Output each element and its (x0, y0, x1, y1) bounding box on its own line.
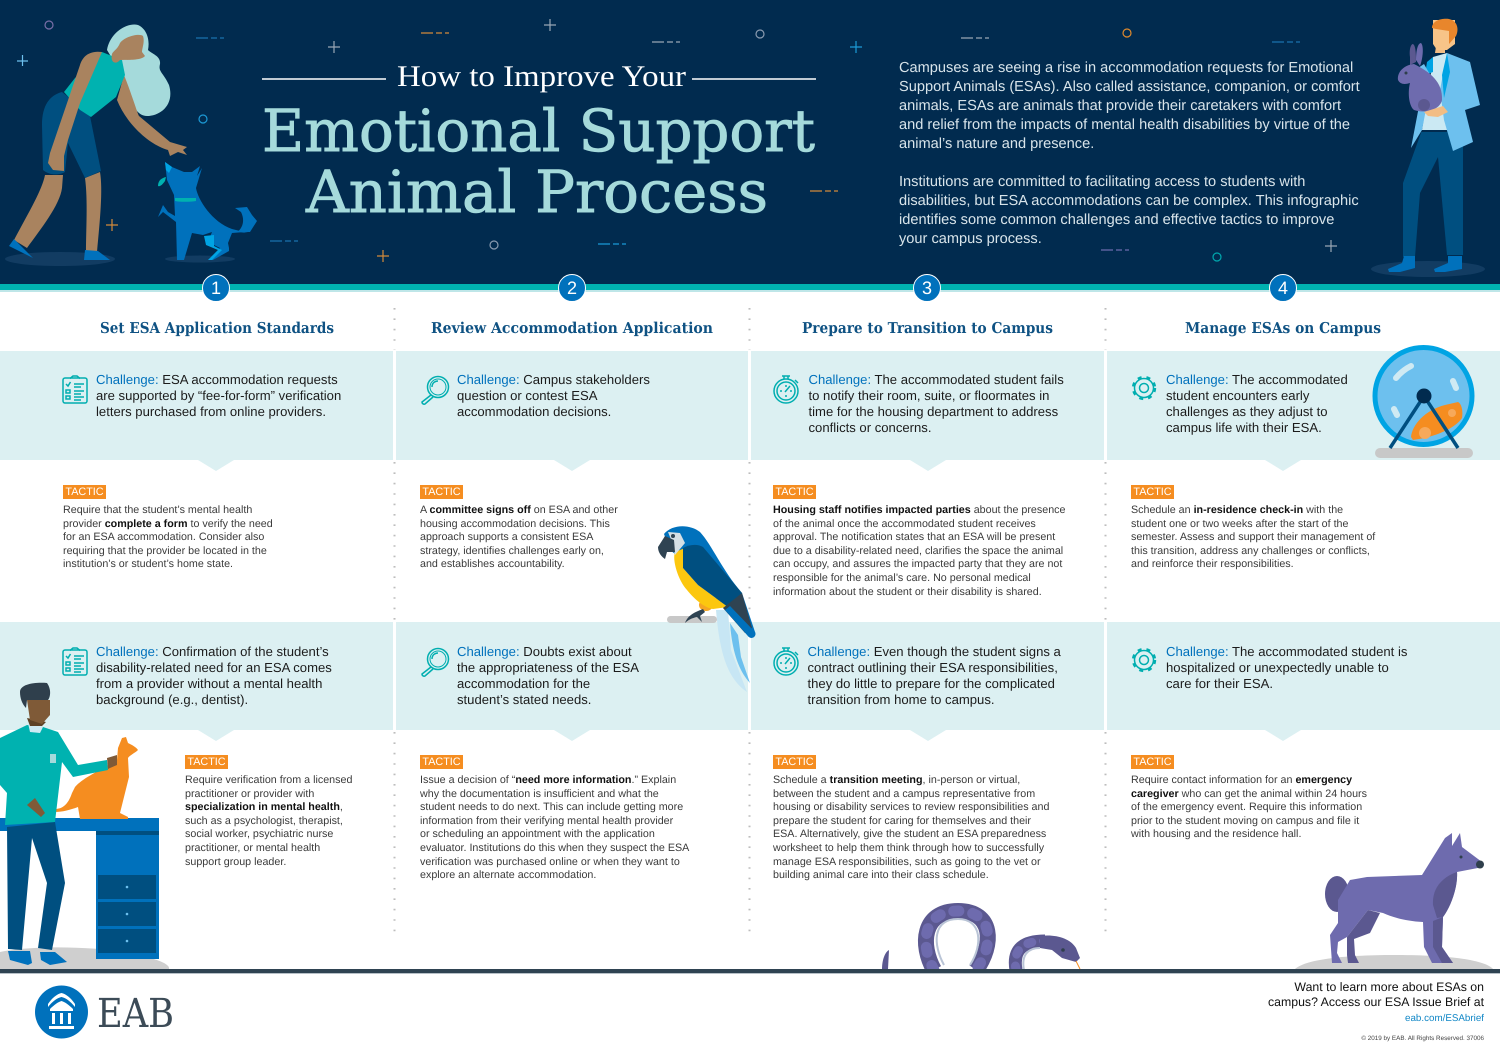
tactic text 3B: prepare the student for caring for themselves and their (773, 815, 1031, 827)
panel: challenge 4A (1107, 351, 1500, 460)
tactic text 1A: Require that the student’s mental health (63, 504, 252, 516)
tactic text 3A: of the animal once the accommodated student receives (773, 518, 1036, 530)
tactic text 3B: ESA. Alternatively, give the student an ESA preparedness (773, 828, 1046, 840)
tactic text 4A: student one or two weeks after the start of the (1131, 518, 1348, 530)
tactic text 2A: strategy, identifies challenges early on, (420, 545, 604, 557)
notch (198, 460, 234, 471)
tactic text 1B: practitioner, or mental health (185, 842, 320, 854)
tactic text 3A: can occupy, and assures the impacted party that they are not (773, 558, 1062, 570)
tactic text 2B: or scheduling an appointment with the application (420, 828, 655, 840)
teal band (0, 284, 1500, 292)
title: Animal Process (305, 158, 768, 226)
tactic text 1A: institution’s or student’s home state. (63, 558, 233, 570)
icon: stopwatch (773, 375, 799, 404)
challenge text 2A: Challenge: Campus stakeholders (457, 372, 650, 387)
tactic text 4A: Schedule an in-residence check-in with the (1131, 504, 1343, 516)
icon: stopwatch (773, 647, 799, 676)
panel: challenge 2B (396, 622, 748, 730)
step number 4 (1269, 274, 1297, 302)
notch (554, 730, 590, 741)
challenge text 4A: Challenge: The accommodated (1166, 372, 1348, 387)
challenge text 1B: background (e.g., dentist). (96, 692, 248, 707)
tactic text 4A (1131, 504, 1376, 570)
column headings: Manage ESAs on Campus (1185, 319, 1381, 337)
challenge text 1A (96, 372, 341, 419)
tactic label 1A: TACTIC (65, 486, 104, 498)
tactic text 3B: housing or disability services to review responsibilities and (773, 801, 1049, 813)
tactic text 2B: evaluator. Institutions do this when they suspect the ESA (420, 842, 689, 854)
step number 3: 3 (922, 278, 932, 298)
challenge text 4A: campus life with their ESA. (1166, 420, 1322, 435)
intro paragraph (899, 60, 1360, 246)
tactic label 4B: TACTIC (1133, 756, 1172, 768)
footer call to action: Want to learn more about ESAs on (1294, 980, 1484, 994)
challenge text 3A: to notify their room, suite, or floormates in (808, 388, 1049, 403)
icon: magnifier (421, 376, 450, 405)
panel: challenge 4B (1107, 622, 1500, 730)
header background (0, 0, 1500, 284)
challenge text 4B: Challenge: The accommodated student is (1166, 644, 1407, 659)
challenge text 2B: the appropriateness of the ESA (457, 660, 639, 675)
tactic text 2A: and establishes accountability. (420, 558, 565, 570)
step number 1 (202, 274, 230, 302)
tactic text 1A (63, 504, 273, 570)
logo: EAB (35, 986, 174, 1038)
challenge text 3A (808, 372, 1064, 435)
tactic text 1A: for an ESA accommodation. Consider also (63, 531, 264, 543)
tactic text 3A: responsible for the animal’s care. No personal medical (773, 572, 1031, 584)
challenge text 2A: accommodation decisions. (457, 404, 611, 419)
tactic text 3B: Schedule a transition meeting, in-person or virtual, (773, 774, 1020, 786)
challenge text 4A: student encounters early (1166, 388, 1309, 403)
tactic text 2B: Issue a decision of “need more information.” Explain (420, 774, 676, 786)
step number 1: 1 (211, 278, 221, 298)
tactic text 1B: specialization in mental health, (185, 801, 343, 813)
challenge text 2B: accommodation for the (457, 676, 590, 691)
bottom rule (0, 969, 1500, 981)
tactic text 2A: approach supports a consistent ESA (420, 531, 593, 543)
tactic text 1B (185, 774, 352, 868)
notch (1265, 730, 1301, 741)
footer call to action: campus? Access our ESA Issue Brief at (1268, 994, 1484, 1008)
panel: challenge 3B (751, 622, 1104, 730)
step number 2 (558, 274, 586, 302)
tactic text 2B: explore an alternate accommodation. (420, 869, 596, 881)
panel: challenge 2A (396, 351, 748, 460)
icon: clipboard (62, 647, 88, 676)
challenge text 2B: student’s stated needs. (457, 692, 591, 707)
tactic text 3B: worksheet to help them think through how to successfully (773, 842, 1044, 854)
notch (1265, 460, 1301, 471)
challenge text 3A: conflicts or concerns. (808, 420, 931, 435)
challenge text 4B: care for their ESA. (1166, 676, 1273, 691)
tactic text 4B: prior to the student moving on campus and file it (1131, 815, 1359, 827)
tactic text 1B: such as a psychologist, therapist, (185, 815, 343, 827)
intro paragraph: Institutions are committed to facilitating access to students with (899, 174, 1305, 190)
challenge text 3B: transition from home to campus. (808, 692, 995, 707)
tactic label 3A: TACTIC (775, 486, 814, 498)
tactic text 2B: why the documentation is insufficient and what the (420, 788, 659, 800)
challenge text 2B: Challenge: Doubts exist about (457, 644, 632, 659)
tactic text 3A: approval. The notification states that an ESA will be present (773, 531, 1055, 543)
challenge text 2B (457, 644, 639, 707)
illustration: snake (882, 911, 1080, 970)
challenge text 1B: Challenge: Confirmation of the student’s (96, 644, 329, 659)
tactic text 4A: this transition, address any challenges or conflicts, (1131, 545, 1370, 557)
tactic text 1A: provider complete a form to verify the need (63, 518, 273, 530)
intro paragraph: identifies some common challenges and effective tactics to improve (899, 212, 1334, 228)
notch (198, 730, 234, 741)
column headings: Prepare to Transition to Campus (802, 319, 1053, 337)
notch (910, 730, 946, 741)
intro paragraph: animals, ESAs are animals that provide their caretakers with comfort (899, 98, 1341, 114)
column headings (100, 319, 1381, 337)
tactic label 2A: TACTIC (422, 486, 461, 498)
tactic label 1B: TACTIC (187, 756, 226, 768)
challenge text 3B (808, 644, 1061, 707)
column headings: Set ESA Application Standards (100, 319, 334, 337)
title: How to Improve Your (397, 60, 686, 93)
copyright: © 2019 by EAB. All Rights Reserved. 37006 (1361, 1035, 1484, 1042)
notch (554, 460, 590, 471)
challenge text 2A (457, 372, 650, 419)
tactic text 3A: due to a disability-related need, clarifies the space the animal (773, 545, 1063, 557)
challenge text 4A: challenges as they adjust to (1166, 404, 1328, 419)
illustration: vet with cat at table (0, 683, 169, 969)
tactic text 3B: between the student and a campus representative from (773, 788, 1035, 800)
challenge text 1A: Challenge: ESA accommodation requests (96, 372, 338, 387)
challenge text 1B: from a provider without a mental health (96, 676, 322, 691)
tactic text 2B: student needs to do next. This can include getting more (420, 801, 683, 813)
tactic text 2A (420, 504, 618, 570)
notch (910, 460, 946, 471)
step number 3 (913, 274, 941, 302)
challenge text 1A: are supported by “fee-for-form” verification (96, 388, 341, 403)
panel: challenge 1A (0, 351, 393, 460)
intro paragraph: animal’s nature and presence. (899, 136, 1094, 152)
tactic text 4A: semester. Assess and support their management of (1131, 531, 1375, 543)
footer call to action (1268, 980, 1484, 1008)
tactic text 2B (420, 774, 690, 881)
intro paragraph: Support Animals (ESAs). Also called assistance, companion, or comfort (899, 78, 1360, 94)
intro paragraph: disabilities, but ESA accommodations can be complex. This infographic (899, 192, 1359, 208)
challenge text 1A: letters purchased from online providers. (96, 404, 326, 419)
tactic text 3B: manage ESA responsibilities, such as going to the vet or (773, 856, 1041, 868)
icon: magnifier (421, 648, 450, 677)
tactic label 4A: TACTIC (1133, 486, 1172, 498)
tactic text 2A: A committee signs off on ESA and other (420, 504, 618, 516)
challenge text 3A: Challenge: The accommodated student fails (808, 372, 1064, 387)
tactic text 3B: building animal care into their class schedule. (773, 869, 989, 881)
challenge text 2A: question or contest ESA (457, 388, 597, 403)
challenge text 3B: they do little to prepare for the complicated (808, 676, 1055, 691)
step number 4: 4 (1278, 278, 1288, 298)
illustration: woman (5, 24, 187, 266)
challenge text 1B: disability-related need for an ESA comes (96, 660, 332, 675)
icon: gear (1132, 376, 1156, 400)
tactic text 4B: Require contact information for an emergency (1131, 774, 1352, 786)
tactic text 1B: practitioner or provider with (185, 788, 314, 800)
panel: challenge 3A (751, 351, 1104, 460)
step number 2: 2 (567, 278, 577, 298)
tactic text 1B: Require verification from a licensed (185, 774, 352, 786)
icon: gear (1132, 648, 1156, 672)
illustration: purple dog (1295, 833, 1493, 969)
illustration: blue dog (158, 162, 257, 262)
challenge text 3A: time for the housing department to address (808, 404, 1058, 419)
tactic text 4A: and reinforce their responsibilities. (1131, 558, 1294, 570)
title: Emotional Support (262, 97, 815, 165)
intro paragraph: your campus process. (899, 230, 1042, 246)
tactic text 3A (773, 504, 1066, 598)
tactic text 3A: Housing staff notifies impacted parties about the presence (773, 504, 1066, 516)
footer link: eab.com/ESAbrief (1405, 1013, 1484, 1024)
column headings: Review Accommodation Application (431, 319, 713, 337)
illustration: man holding rabbit (1371, 19, 1485, 277)
tactic text 1A: requiring that the provider be located in the (63, 545, 267, 557)
challenge text 3B: Challenge: Even though the student signs a (808, 644, 1061, 659)
icon: clipboard (62, 375, 88, 404)
title (262, 60, 816, 226)
tactic label 2B: TACTIC (422, 756, 461, 768)
illustration: hamster wheel (1375, 348, 1473, 458)
challenge text 4B (1166, 644, 1407, 691)
challenge text 3B: contract outlining their ESA responsibilities, (808, 660, 1058, 675)
tactic label 3B: TACTIC (775, 756, 814, 768)
tactic text 4B (1131, 774, 1367, 840)
challenge text 4B: hospitalized or unexpectedly unable to (1166, 660, 1389, 675)
challenge text 1B (96, 644, 332, 707)
panel: challenge 1B (0, 622, 393, 730)
tactic text 4B: of the emergency event. Require this information (1131, 801, 1362, 813)
illustration: parrot (658, 526, 755, 692)
intro paragraph: and relief from the impacts of mental health disabilities by virtue of the (899, 116, 1350, 132)
intro paragraph: Campuses are seeing a rise in accommodation requests for Emotional (899, 60, 1353, 76)
tactic text 4B: with housing and the residence hall. (1131, 828, 1301, 840)
tactic text 3B (773, 774, 1049, 881)
tactic text 2B: information from their verifying mental health provider (420, 815, 673, 827)
tactic text 1B: social worker, psychiatric nurse (185, 828, 333, 840)
tactic text 1B: support group leader. (185, 856, 286, 868)
tactic text 3A: information about the student or their disability is shared. (773, 586, 1042, 598)
tactic text 2A: housing accommodation decisions. This (420, 518, 610, 530)
tactic text 4B: caregiver who can get the animal within 24 hours (1131, 788, 1367, 800)
challenge text 4A (1166, 372, 1348, 435)
tactic text 2B: verification was purchased online or when they want to (420, 856, 680, 868)
